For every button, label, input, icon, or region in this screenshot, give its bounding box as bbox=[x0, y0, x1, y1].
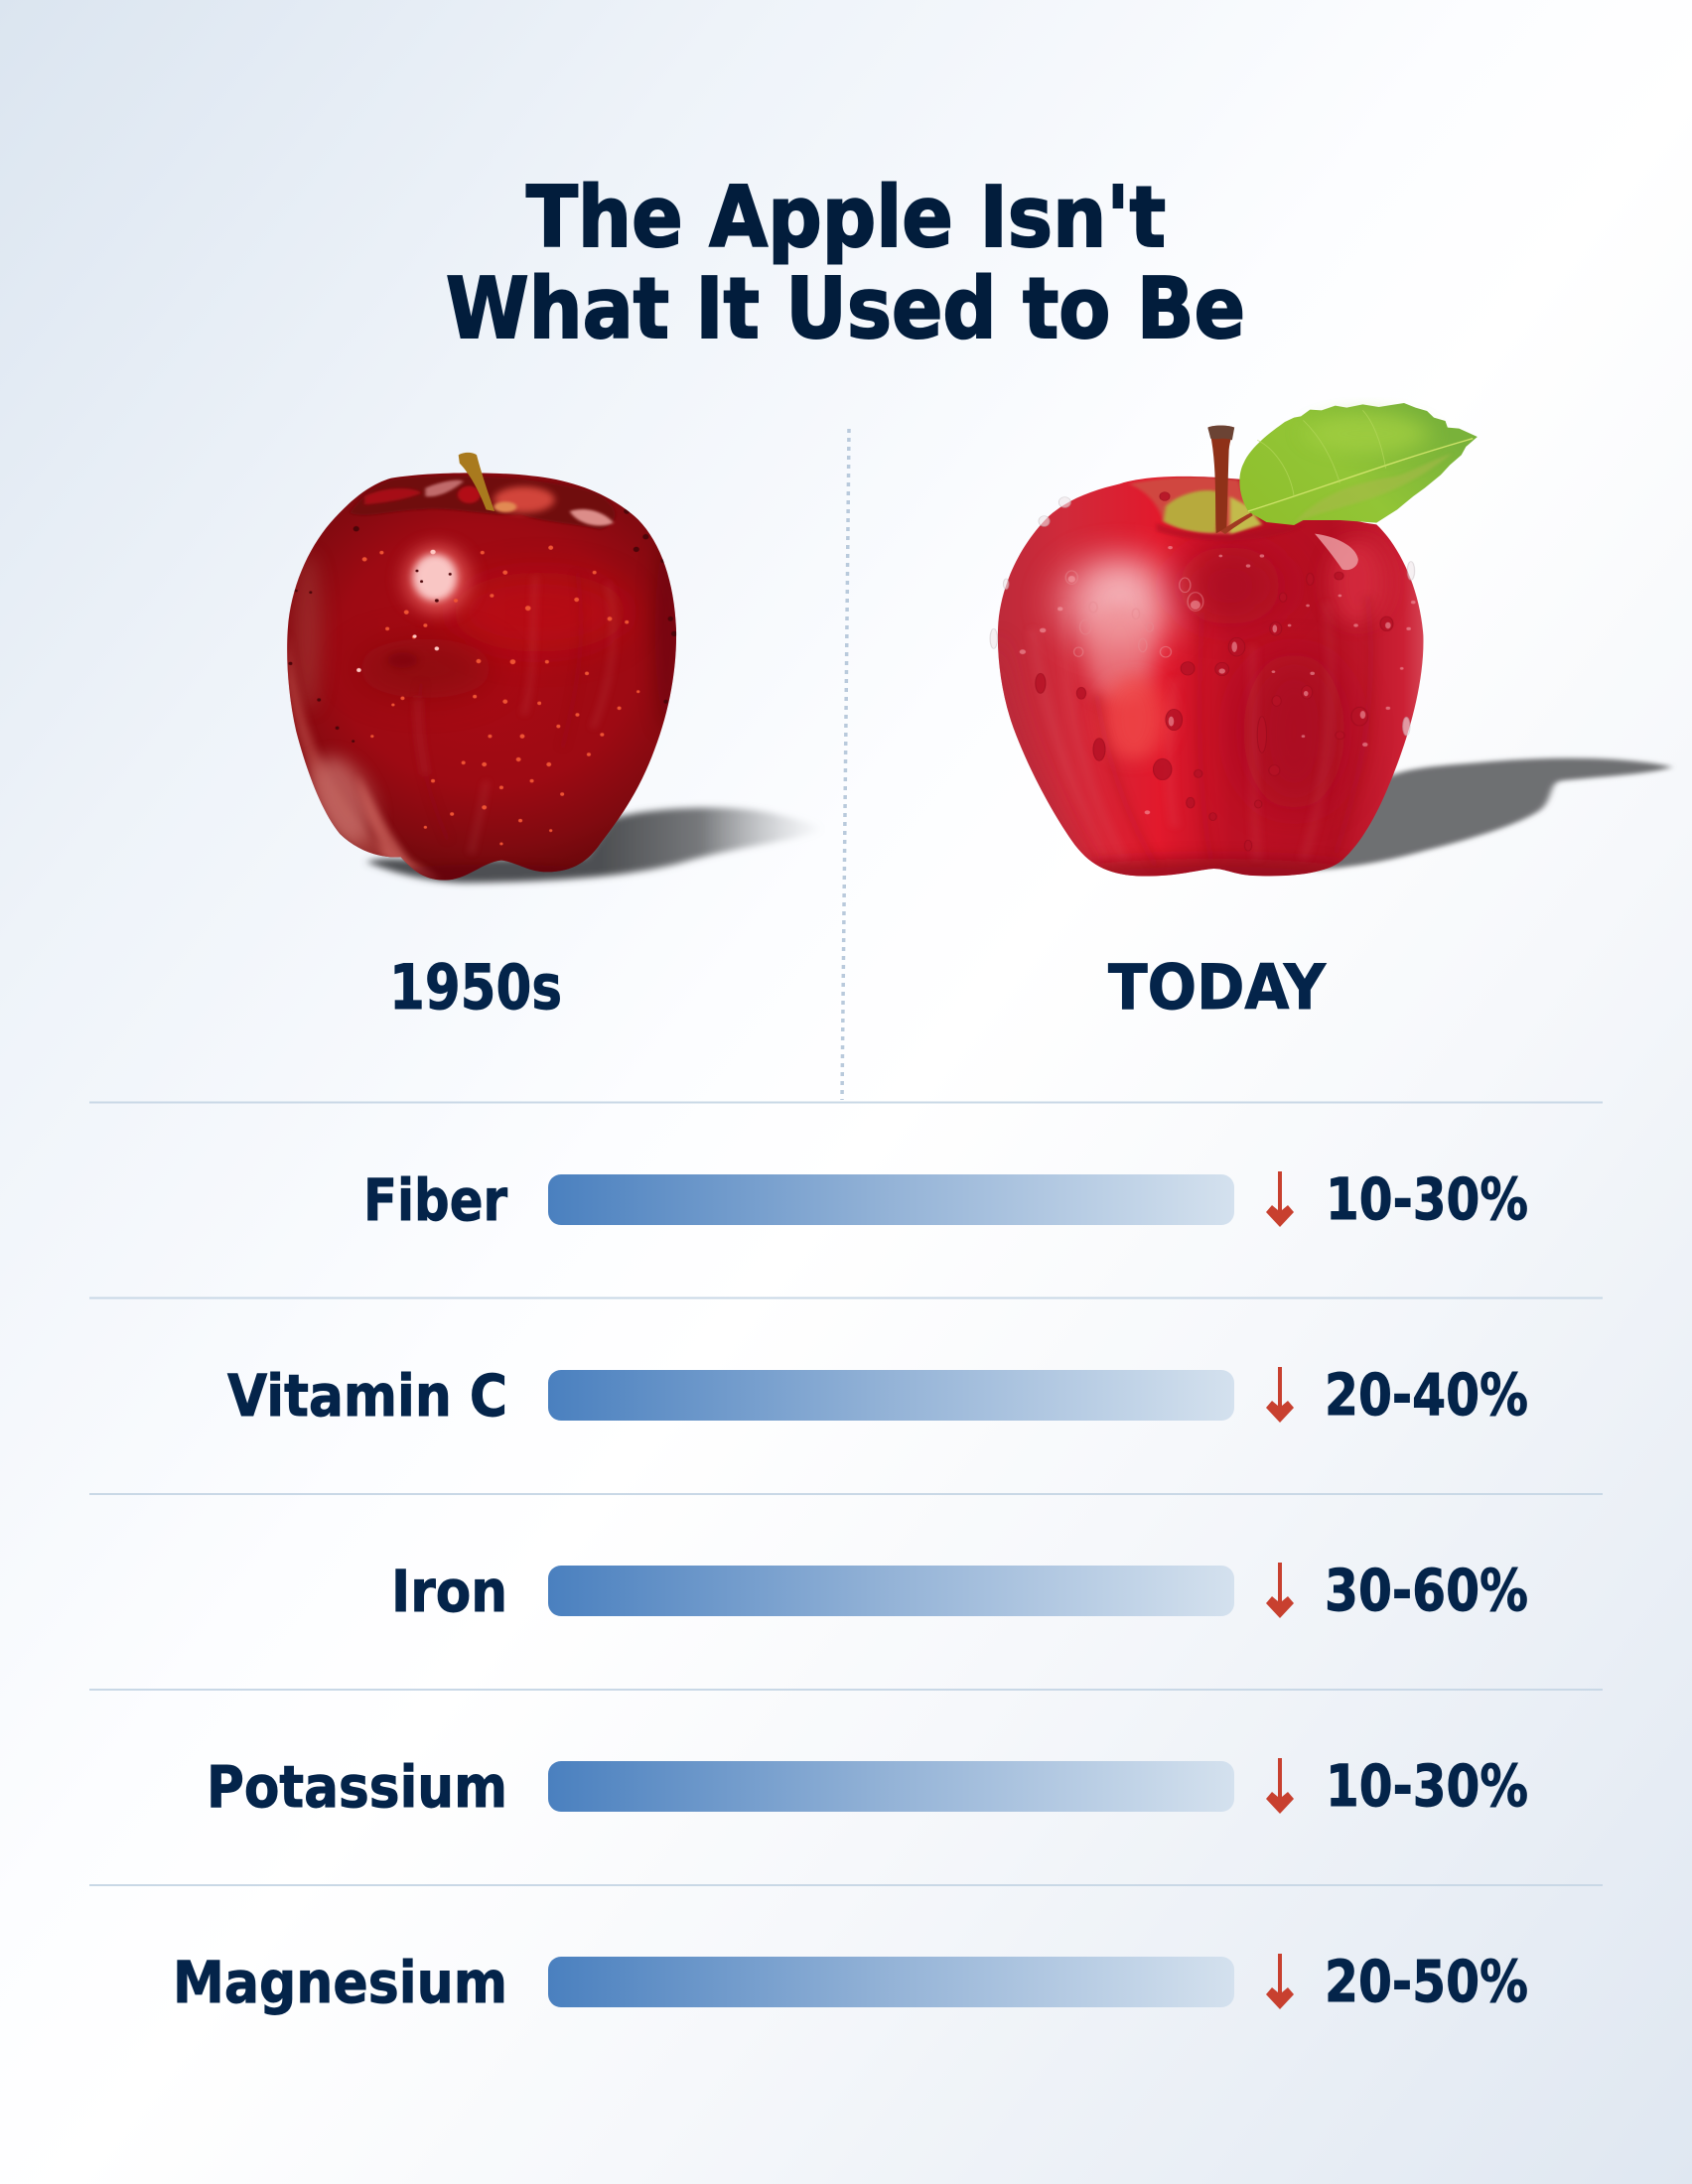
iron down arrow bbox=[1266, 1563, 1294, 1618]
vitamin c label: Vitamin C bbox=[227, 1362, 507, 1430]
title: What It Used to Be bbox=[446, 260, 1245, 358]
apple today body bbox=[987, 470, 1432, 888]
apple today shadow bbox=[1313, 758, 1672, 871]
apple: today bbox=[987, 403, 1672, 888]
row: vitamin c bbox=[227, 1361, 1528, 1430]
dotted vertical divider bbox=[842, 429, 849, 1100]
row: iron bbox=[391, 1557, 1528, 1625]
fiber label: Fiber bbox=[363, 1166, 507, 1234]
apple today gloss on shoulder bbox=[1315, 534, 1358, 570]
apple 1950s specks bbox=[289, 508, 677, 845]
row: potassium bbox=[207, 1752, 1528, 1821]
potassium bar bbox=[548, 1761, 1234, 1812]
apple today stem bbox=[1207, 426, 1234, 533]
vitamin c value: 20-40% bbox=[1325, 1361, 1528, 1429]
fiber value: 10-30% bbox=[1326, 1165, 1528, 1233]
apple: 1950s bbox=[277, 453, 821, 890]
apple today cavity bbox=[1130, 477, 1274, 540]
era label: 1950s: 1950s bbox=[389, 951, 562, 1024]
apple 1950s streaks bbox=[418, 573, 613, 854]
vitamin c down arrow bbox=[1266, 1367, 1294, 1423]
apple today edge drops bbox=[990, 497, 1415, 736]
magnesium down arrow bbox=[1266, 1954, 1294, 2009]
row divider lines bbox=[89, 1102, 1603, 1885]
apple 1950s stem bbox=[459, 453, 494, 511]
magnesium bar bbox=[548, 1957, 1234, 2007]
title: The Apple Isn't bbox=[526, 169, 1166, 267]
potassium value: 10-30% bbox=[1326, 1752, 1528, 1820]
apple today streaks bbox=[1095, 617, 1333, 856]
potassium label: Potassium bbox=[207, 1753, 507, 1821]
title bbox=[446, 169, 1245, 358]
apple 1950s highlight bbox=[404, 544, 469, 614]
row: fiber bbox=[363, 1165, 1528, 1234]
apple 1950s body bbox=[277, 467, 687, 890]
apple today leaf bbox=[1239, 403, 1478, 525]
fiber down arrow bbox=[1266, 1171, 1294, 1227]
infographic canvas bbox=[89, 181, 1674, 2015]
magnesium value: 20-50% bbox=[1325, 1948, 1528, 2015]
iron label: Iron bbox=[391, 1558, 507, 1625]
iron bar bbox=[548, 1566, 1234, 1616]
apple 1950s shadow bbox=[366, 808, 821, 883]
apple 1950s top cavity bbox=[350, 476, 616, 529]
iron value: 30-60% bbox=[1325, 1557, 1528, 1624]
apple today water drops bbox=[1020, 492, 1416, 851]
potassium down arrow bbox=[1266, 1758, 1294, 1814]
era label: today: TODAY bbox=[1108, 951, 1327, 1024]
fiber bar bbox=[548, 1174, 1234, 1225]
magnesium label: Magnesium bbox=[173, 1949, 507, 2016]
vitamin c bar bbox=[548, 1370, 1234, 1421]
row: magnesium bbox=[173, 1948, 1528, 2016]
